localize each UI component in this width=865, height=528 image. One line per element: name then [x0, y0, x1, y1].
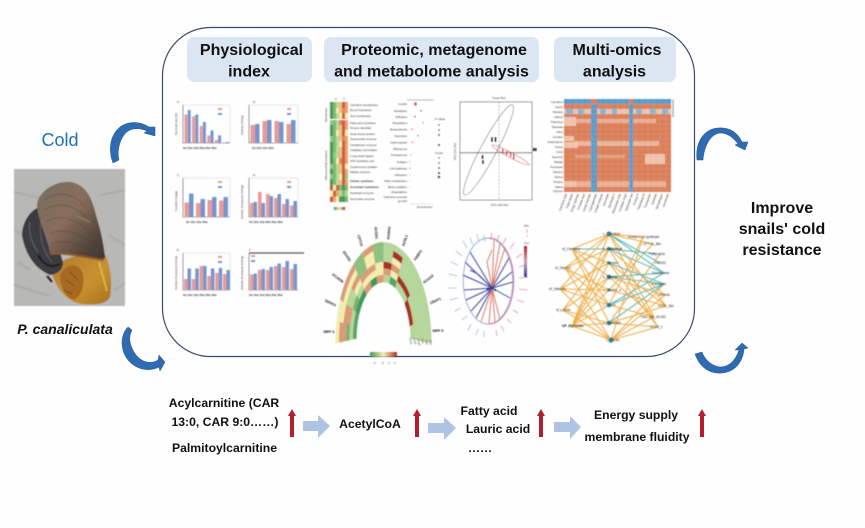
row labels: Oleic [556, 130, 563, 134]
row labels: Palmitoyl [551, 120, 563, 124]
network diagram: Desaturase [652, 271, 669, 275]
outcome text: Improve [751, 200, 813, 217]
bar chart E: E [177, 248, 179, 252]
row labels: Proline [554, 180, 563, 184]
colour key [672, 100, 674, 118]
column labels: Kinase P [632, 193, 640, 206]
bar chart D: D [253, 173, 256, 177]
dot plot: enrichment: Insulin [398, 102, 407, 106]
network diagram: Elongase [652, 282, 666, 286]
correlation circle: PPI [524, 224, 529, 228]
flow arrow 2 [428, 417, 456, 440]
bar chart C: Content (mg/g) [174, 191, 178, 211]
column labels: Enoyl hydrase [570, 193, 580, 212]
row labels: Acetyl [555, 145, 563, 149]
column labels [558, 193, 670, 214]
network diagram: DP_Myristate [562, 324, 584, 328]
photo: apple snail [14, 169, 125, 306]
dot plot: enrichment: Enrichment [417, 205, 432, 209]
heatmap: differential proteins: Membrane [324, 107, 328, 122]
ring labels: Trt1 [420, 338, 425, 344]
heatmap: differential proteins: T [343, 97, 345, 101]
arrow: cold to panel [110, 122, 155, 163]
pathway: fatty acids: Lauric acid [466, 422, 530, 436]
network diagram: L_Myristic [603, 261, 619, 265]
flow arrow 1 [303, 415, 330, 438]
heading: multi-omics analysis: analysis [583, 64, 646, 80]
flow arrow 3 [554, 416, 581, 439]
heatmap: differential proteins: Aconitate hydratase [350, 185, 379, 189]
heatmap: differential proteins: Catalase peroxidase [350, 148, 378, 152]
up arrow 2 [413, 409, 421, 437]
heatmap: differential proteins: ATP synthase unit [350, 159, 374, 163]
network diagram: Acetyl-CoA synthase [628, 235, 659, 239]
heatmap: differential proteins: Isocitrate enzyme [350, 191, 374, 195]
row labels: Lauric [555, 105, 563, 109]
ring labels: Trt3 [428, 339, 433, 345]
bar chart C: 5d 10d 15d 20d [186, 220, 208, 224]
shell spire [22, 207, 63, 275]
bar chart A: A [177, 100, 179, 104]
heatmap: differential proteins [324, 97, 379, 210]
network diagram: L_Valeric [603, 275, 618, 279]
row labels: Citric [556, 150, 563, 154]
row labels: Valine [555, 185, 563, 189]
heatmap: differential proteins: Heat shock protein [350, 132, 375, 136]
gene labels: CRAT1 [429, 297, 442, 305]
network diagram: L_Palmitoyl [603, 247, 622, 251]
network diagram: L_Carnitine [603, 232, 620, 236]
arrow: panel to outcome top [697, 128, 748, 160]
bar chart D [240, 173, 298, 224]
heading: multi-omics analysis [554, 37, 676, 82]
row labels: Fumarate [550, 165, 563, 169]
bar chart F [240, 248, 304, 297]
bar chart F: F [249, 248, 251, 252]
dot plot: enrichment: Metabolic [394, 109, 407, 113]
gene labels: ACAA2 [422, 274, 434, 285]
up arrow 4 [698, 409, 706, 437]
row labels: Glycine [553, 189, 563, 193]
heatmap: differential proteins: Acyl synthetase [350, 114, 371, 118]
column labels: Catalase [650, 193, 658, 205]
dot plot: enrichment: Carnitine process [384, 195, 408, 199]
network diagram: Fatty_acid [649, 252, 665, 256]
dot plot: enrichment: Proteasome [391, 153, 407, 157]
bar chart B: 5d 10d 15d 20d [252, 146, 274, 150]
bar chart E: 5d 10d 15d 20d 25d 30d [183, 293, 217, 297]
bar chart E [174, 248, 230, 297]
network diagram: SCD5_1 [650, 325, 663, 329]
column labels: Acetyl transfer [582, 193, 592, 212]
ring labels: Con1 [408, 337, 414, 345]
column labels: Isomerase [661, 193, 670, 208]
colour legend: -1 [373, 361, 376, 365]
heatmap: differential proteins: Enoyl hydratase [350, 108, 372, 112]
network diagram [549, 232, 674, 343]
column labels: Hydrolase set [624, 193, 634, 212]
up arrow 1 [288, 409, 296, 437]
circular heatmap [324, 226, 443, 365]
row labels: Stearate [552, 125, 563, 129]
bar chart F: Activity of enzyme (U/mg) [240, 256, 244, 290]
gene labels: CPT1A [356, 234, 364, 247]
column labels: Citrate enzyme [593, 193, 604, 213]
column labels: Carnitine acyl [558, 193, 568, 211]
heading: proteomic, metagenome and metabolome analysis: Proteomic, metagenome [341, 42, 527, 59]
heatmap: differential proteins: Malate enzyme [350, 170, 371, 174]
ring 2 [341, 252, 426, 342]
species name: P. canaliculata [17, 321, 113, 337]
bar chart B [240, 100, 298, 150]
heading: physiological index [187, 37, 312, 82]
ring 1 [337, 246, 430, 343]
heading: physiological index: Physiological [200, 42, 303, 59]
heatmap: differential proteins: Long-chain ligase [350, 154, 374, 158]
network diagram: ACSL_like [658, 304, 674, 308]
gene labels: MPP 5 [433, 329, 443, 333]
row labels: Serine [554, 175, 563, 179]
grid lines [564, 99, 671, 192]
column labels: Lipoxygenase [588, 193, 598, 212]
gene labels: HADHA [386, 226, 392, 240]
bar chart C [174, 173, 230, 224]
outcome text: snails' cold [739, 221, 825, 238]
dot plot: enrichment: Cell pathway [390, 166, 407, 170]
column labels: Aconitase [602, 193, 610, 207]
ring labels: Con2 [412, 337, 418, 345]
row labels: Arachidonic [547, 140, 563, 144]
column labels: Transporter [643, 193, 652, 209]
pathway: outcomes: Energy supply [594, 408, 678, 422]
heading: multi-omics analysis: Multi-omics [573, 42, 662, 59]
column labels: Fatty ligase [565, 193, 574, 209]
bar chart D: Activity of enzyme (U/mg) [240, 185, 244, 219]
network diagram: of_Valerate [549, 287, 566, 291]
row labels: Alanine [553, 170, 563, 174]
dot plot: enrichment: degradation [391, 190, 407, 194]
label: Cold: Cold [41, 130, 79, 150]
network diagram: of_Carnitine [562, 247, 580, 251]
network diagram: L_Oleate [606, 338, 620, 342]
row labels: Malate [554, 160, 563, 164]
ring 4 [348, 266, 419, 341]
row labels: Succinic [552, 155, 563, 159]
dot plot: enrichment: Fatty metabolism [384, 179, 407, 183]
ring labels [408, 337, 433, 346]
heatmap: differential proteins: Glutathione enzyme [350, 143, 377, 147]
pathway: outcomes: membrane fluidity [585, 430, 690, 444]
pathway: fatty acids [461, 404, 530, 455]
column labels: Oxidase chain [618, 193, 628, 212]
panel: multi-omics frame [162, 28, 694, 356]
ring 6 [355, 279, 412, 339]
row labels: Valeric [554, 115, 563, 119]
row labels: Linoleic [553, 135, 563, 139]
dot plot: enrichment: Beta oxidation [388, 185, 407, 189]
gene labels: ACSL1 [401, 234, 409, 247]
column labels: Dehydrogen [655, 193, 664, 210]
score plot: PCA ellipses: PC1 (40.2%) [491, 203, 508, 207]
gene labels: ECHS1 [342, 250, 352, 262]
bar chart B: Activity (U/mg) [240, 115, 244, 135]
network diagram: L_Stearic_a [603, 288, 621, 292]
network diagram: L_Palmitate [603, 321, 621, 325]
dot plot: enrichment: Secretion [394, 134, 407, 138]
pathway: fatty acids: Fatty acid [461, 404, 517, 418]
arrow: snail to panel bottom [122, 327, 165, 371]
arrow: panel to outcome bottom [695, 343, 748, 373]
column labels: Synthase A [607, 193, 616, 209]
colour legend: 0 [382, 361, 384, 365]
dot plot: enrichment: Biosynthesis [390, 128, 407, 132]
heatmap: differential proteins: Carnitine transferase [350, 103, 378, 107]
shell body whorl [37, 182, 105, 259]
gene labels: FABP4 [413, 250, 423, 261]
network diagram: of_Glycine [555, 266, 571, 270]
gene labels: SDHA1 [324, 299, 337, 307]
heatmap: differential proteins: Fatty acid synthase [350, 121, 376, 125]
pale rows [564, 109, 671, 187]
bar chart C: C [177, 173, 180, 177]
pathway: acylcarnitines: 13:0, CAR 9:0……) [171, 415, 279, 429]
network diagram: of_Lysine [556, 308, 571, 312]
dot plot: enrichment: Lipid signals [390, 140, 407, 144]
correlation circle: Cor [524, 241, 529, 245]
bar charts: physiological index [174, 100, 304, 297]
pathway: acylcarnitines: Palmitoylcarnitine [172, 441, 277, 455]
bar chart A [174, 100, 230, 150]
dot plot: enrichment: P-value [435, 117, 446, 121]
pathway: acylcarnitines: Acylcarnitine (CAR [169, 396, 279, 410]
dot plot: enrichment: Antigen [397, 160, 407, 164]
column labels: Reductase mito [611, 193, 622, 214]
outcome text [739, 200, 825, 259]
bar chart F: 5d 10d 15d 20d 25d 30d [249, 293, 283, 297]
heatmap: differential proteins: Superoxide enzyme [350, 137, 377, 141]
network diagram: L_Lauric [603, 303, 616, 307]
correlation circle [448, 224, 529, 337]
pathway: fatty acids: …… [468, 441, 492, 455]
row labels [547, 100, 563, 193]
dot plot: enrichment: growth [398, 199, 407, 203]
heatmap: differential proteins: Succinate enzyme [350, 197, 375, 201]
pathway: outcomes [585, 408, 690, 444]
column labels: Thiolase acyl [576, 193, 586, 211]
outcome text: resistance [742, 242, 822, 259]
ring labels: Con3 [416, 338, 422, 346]
ring 3 [344, 259, 423, 341]
dot plot: enrichment: Adhesion [394, 173, 407, 177]
network diagram: CPT1A_like [643, 242, 661, 246]
gene labels [324, 226, 443, 334]
network diagram: HADHA [658, 293, 671, 297]
heatmap: differential proteins: Protein disulfide [350, 126, 372, 130]
dot plot: enrichment: Diffusion [395, 115, 407, 119]
gene labels: ACOX1 [373, 227, 379, 239]
colour legend [370, 352, 397, 365]
gene labels: ACADM [331, 273, 344, 284]
bar chart B: B [253, 100, 255, 104]
foot [51, 253, 111, 304]
heatmap: differential proteins: Mitochondrial proteins [324, 150, 328, 180]
ring labels: Trt2 [424, 339, 429, 345]
network diagram: FAD-dep_ACAD [641, 315, 666, 319]
pathway: acylcarnitines [169, 396, 279, 455]
row labels: Myristic [553, 110, 563, 114]
dot plot: enrichment [384, 100, 446, 209]
heading: physiological index: index [228, 64, 270, 80]
heading: proteomic, metagenome and metabolome analysis [324, 37, 539, 82]
heatmap: differential proteins: C [335, 97, 338, 101]
bar chart E: Activity of enzyme (U/mg) [174, 256, 178, 290]
score plot: PCA ellipses: PC2 (15.3%) [453, 143, 457, 160]
gene labels: MPP 3 [324, 330, 334, 334]
bar chart D: 5d 10d 15d 20d 25d 30d [249, 220, 283, 224]
up arrow 3 [537, 409, 545, 437]
heatmap: differential proteins: Cytochrome oxidase [350, 165, 378, 169]
score plot: PCA ellipses [453, 96, 536, 207]
bar chart A: 5d 10d 15d 20d 25d 30d [183, 146, 217, 150]
dot plot: enrichment: Ribosome [393, 147, 407, 151]
pathway: acetyl-CoA: AcetylCoA [339, 417, 401, 431]
score plot: PCA ellipses: T-test Plot [492, 96, 506, 100]
heading: proteomic, metagenome and metabolome analysis: and metabolome analysis [334, 64, 529, 80]
bar chart A: Survival rate (%) [174, 113, 178, 135]
row labels: Carnitine [551, 100, 563, 104]
ring 5 [351, 272, 416, 340]
outer label strokes [448, 233, 528, 337]
colour legend: 1 [388, 361, 390, 365]
dot plot: enrichment: Regulation [393, 121, 407, 125]
network diagram: FADS2 [655, 261, 666, 265]
heatmap: differential proteins: Citrate synthase [350, 179, 374, 183]
dot plot: enrichment: Count [435, 151, 443, 155]
column labels: Peptidase M [636, 193, 646, 210]
colour legend: 2 [394, 361, 396, 365]
heatmap: multi-omics correlation [547, 99, 673, 214]
